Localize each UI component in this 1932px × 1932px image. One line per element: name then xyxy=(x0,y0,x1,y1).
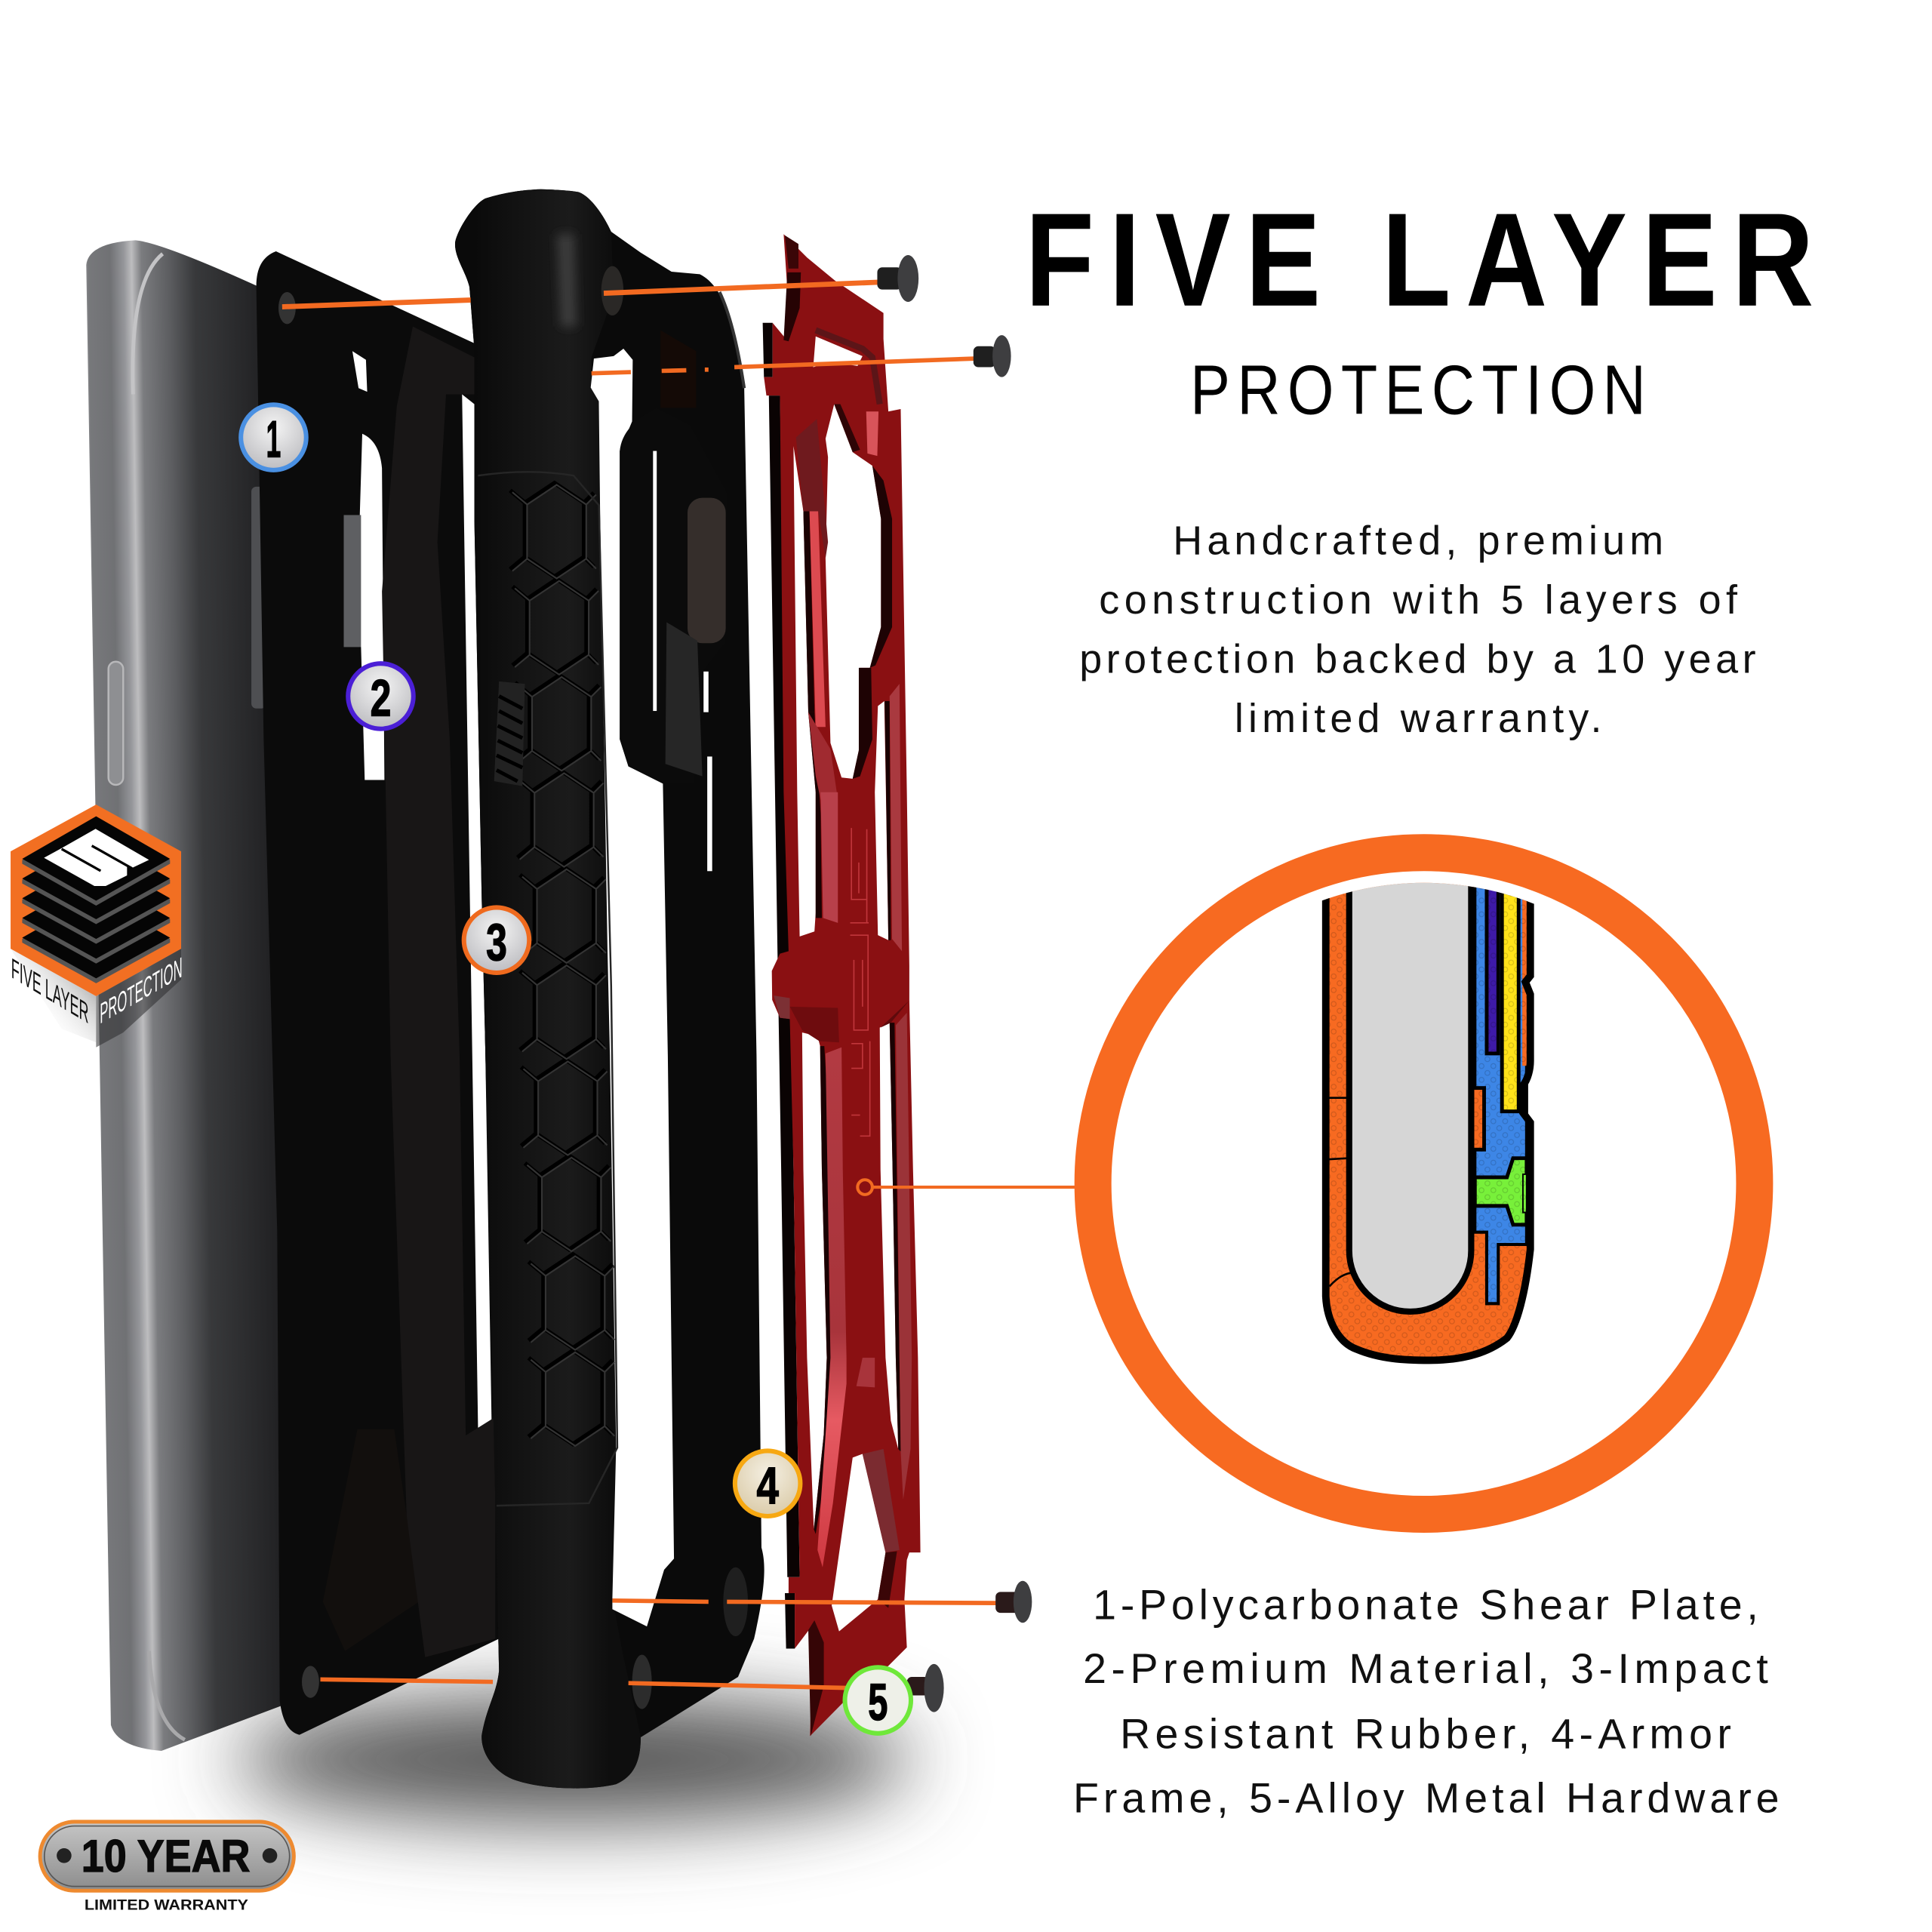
cross-section magnifier ring xyxy=(1093,853,1755,1515)
number badge 1: 1 xyxy=(266,411,281,469)
subheading: PROTECTION xyxy=(1190,352,1646,429)
parts list text: 2-Premium Material, 3-Impact xyxy=(1083,1645,1768,1692)
layer 1: polycarbonate shear plate xyxy=(257,251,499,1735)
number badge 4: 4 xyxy=(756,1457,779,1515)
screw 2 xyxy=(974,335,1011,377)
description text: Handcrafted, premium xyxy=(1173,518,1663,564)
parts list text: Frame, 5-Alloy Metal Hardware xyxy=(1073,1775,1780,1822)
description text: construction with 5 layers of xyxy=(1099,577,1738,623)
logo stripes xyxy=(494,681,525,786)
description text: limited warranty. xyxy=(1235,696,1601,741)
orange screw alignment lines xyxy=(282,282,997,1688)
layer 2: premium material strip xyxy=(382,327,495,1657)
warranty badge xyxy=(40,1822,294,1914)
grip outline xyxy=(478,472,617,1506)
description text xyxy=(1079,518,1756,741)
five layer protection badge xyxy=(11,804,183,1048)
color layers xyxy=(1473,887,1529,1306)
infographic canvas: PROTECTION xyxy=(100,950,183,1030)
screw 4 xyxy=(907,1664,944,1712)
cross-section diagram xyxy=(1321,851,1537,1367)
callout marker and leader line xyxy=(857,1180,1077,1195)
number badge 2 xyxy=(348,663,414,729)
layer: phone xyxy=(86,240,286,1751)
layer 4: red armor frame xyxy=(763,234,921,1736)
stacked layers icon xyxy=(22,817,170,983)
armor shading and highlights xyxy=(774,235,912,1736)
exploded product illustration xyxy=(86,189,1032,1789)
phone cross-section xyxy=(1349,851,1471,1312)
number badge 2: 2 xyxy=(371,669,391,728)
armor backing strips xyxy=(763,323,800,1648)
screw 3 xyxy=(995,1581,1032,1623)
shell outline xyxy=(1326,851,1531,1360)
description text: protection backed by a 10 year xyxy=(1079,636,1756,681)
heading: FIVE LAYER xyxy=(1025,185,1814,334)
armor body xyxy=(764,234,921,1736)
outer shell joints xyxy=(1330,1097,1351,1287)
frame hole ring xyxy=(601,266,623,315)
number badge 3 xyxy=(464,907,529,973)
rubber sheen xyxy=(557,234,577,327)
number badge 3: 3 xyxy=(486,913,507,971)
number badge 4 xyxy=(735,1451,800,1516)
rubber frame opening xyxy=(591,349,674,1626)
ground shadow xyxy=(234,1698,912,1821)
number badge 5 xyxy=(845,1667,911,1734)
warranty badge: 10 YEAR xyxy=(82,1830,250,1881)
hook detail xyxy=(620,408,727,783)
layer 3: impact resistant rubber frame xyxy=(455,189,764,1789)
number badge 5: 5 xyxy=(868,1673,888,1731)
dot texture xyxy=(1328,884,1527,1357)
hexagon grip pattern highlight xyxy=(512,485,614,1446)
parts list text: 1-Polycarbonate Shear Plate, xyxy=(1093,1581,1758,1628)
parts list text: Resistant Rubber, 4-Armor xyxy=(1120,1711,1731,1758)
hexagon grip pattern dark xyxy=(510,483,612,1444)
warranty badge: LIMITED WARRANTY xyxy=(85,1897,248,1914)
number badge 1 xyxy=(241,405,306,470)
parts list text xyxy=(1073,1581,1780,1822)
screw 1 xyxy=(877,255,918,302)
five layer protection badge: FIVE LAYER xyxy=(11,952,89,1030)
